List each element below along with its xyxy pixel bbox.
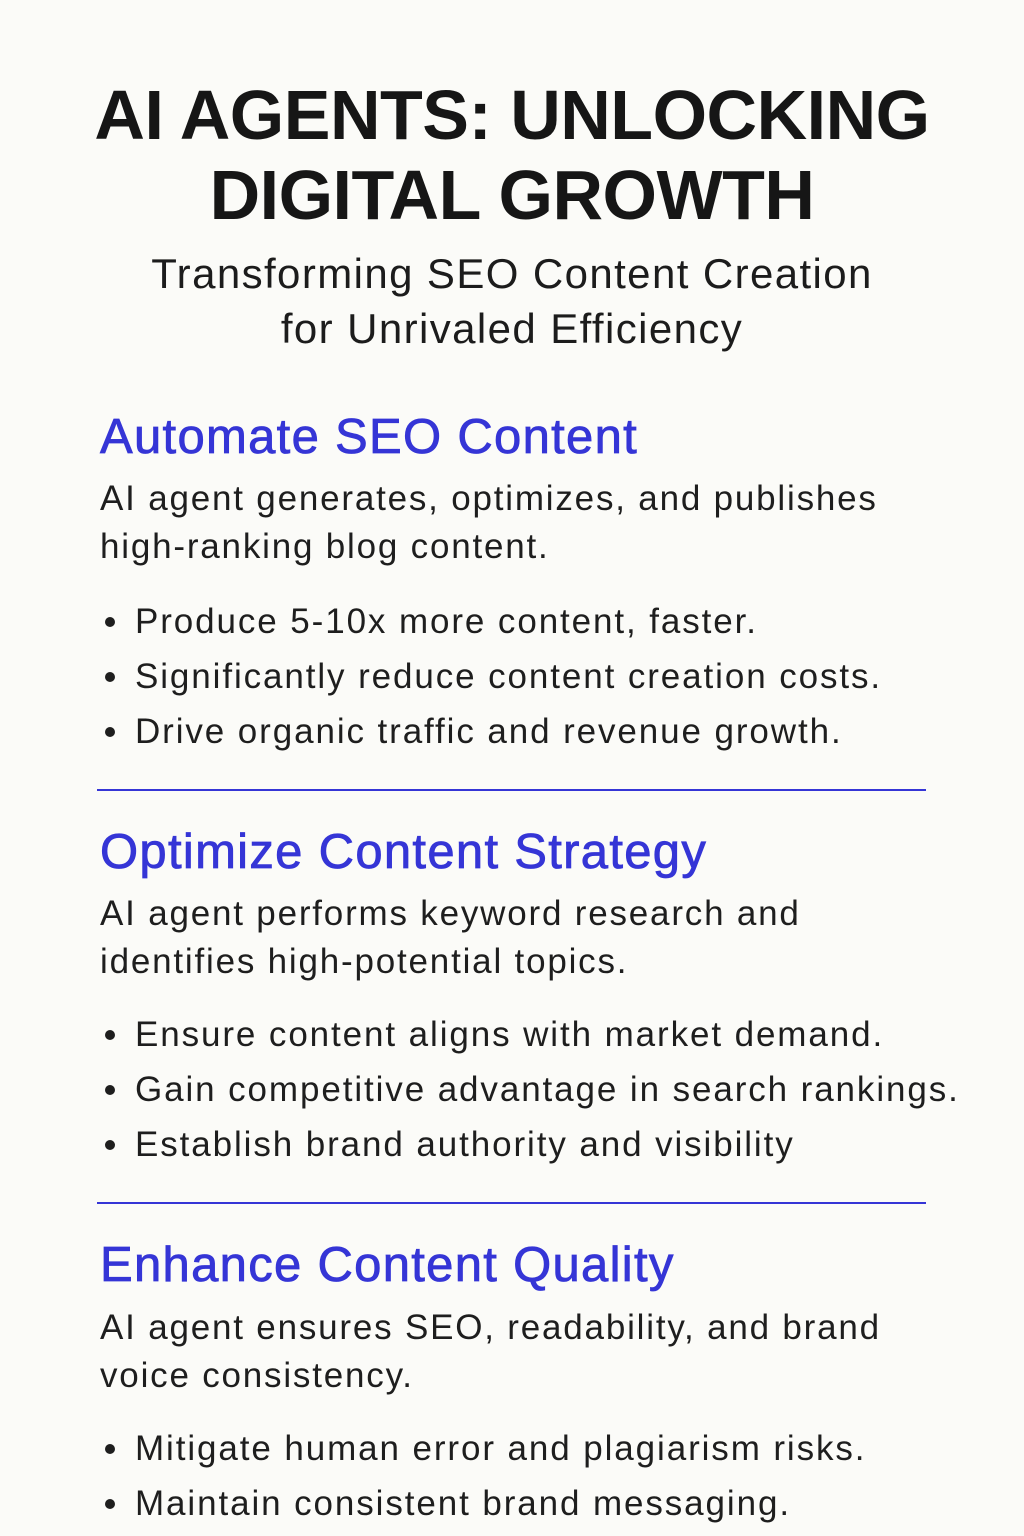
section 1 bullets: Produce 5-10x more content, faster. <box>135 602 758 641</box>
subtitle: for Unrivaled Efficiency <box>281 305 743 352</box>
section 1 description <box>100 479 878 566</box>
section 1 heading: Automate SEO Content <box>100 410 638 464</box>
section 2 bullets: Gain competitive advantage in search rankings. <box>135 1070 960 1109</box>
section 1 bullets: Significantly reduce content creation costs. <box>135 657 882 696</box>
subtitle <box>151 250 873 352</box>
section 3 bullets: Mitigate human error and plagiarism risks. <box>135 1429 866 1468</box>
section 1 bullets <box>105 602 882 751</box>
section 2 bullets: Ensure content aligns with market demand. <box>135 1015 884 1054</box>
title <box>94 76 930 234</box>
section 2 bullets: Establish brand authority and visibility <box>135 1125 795 1164</box>
section 3 heading: Enhance Content Quality <box>100 1238 675 1292</box>
title: DIGITAL GROWTH <box>210 156 814 234</box>
section 2 heading: Optimize Content Strategy <box>100 825 707 879</box>
section 2 description <box>100 894 801 981</box>
section 2 description: AI agent performs keyword research and <box>100 894 801 933</box>
title: AI AGENTS: UNLOCKING <box>94 76 930 154</box>
section 3 description: voice consistency. <box>100 1356 414 1395</box>
section 3 description <box>100 1308 881 1395</box>
section 3 bullets: Maintain consistent brand messaging. <box>135 1484 791 1523</box>
section 3 description: AI agent ensures SEO, readability, and brand <box>100 1308 881 1347</box>
section 1 description: AI agent generates, optimizes, and publishes <box>100 479 878 518</box>
section 2 bullets <box>105 1015 960 1164</box>
subtitle: Transforming SEO Content Creation <box>151 250 873 297</box>
section 3 bullets <box>105 1429 866 1523</box>
section 1 bullets: Drive organic traffic and revenue growth. <box>135 712 843 751</box>
section 1 description: high-ranking blog content. <box>100 527 550 566</box>
section 2 description: identifies high-potential topics. <box>100 942 628 981</box>
